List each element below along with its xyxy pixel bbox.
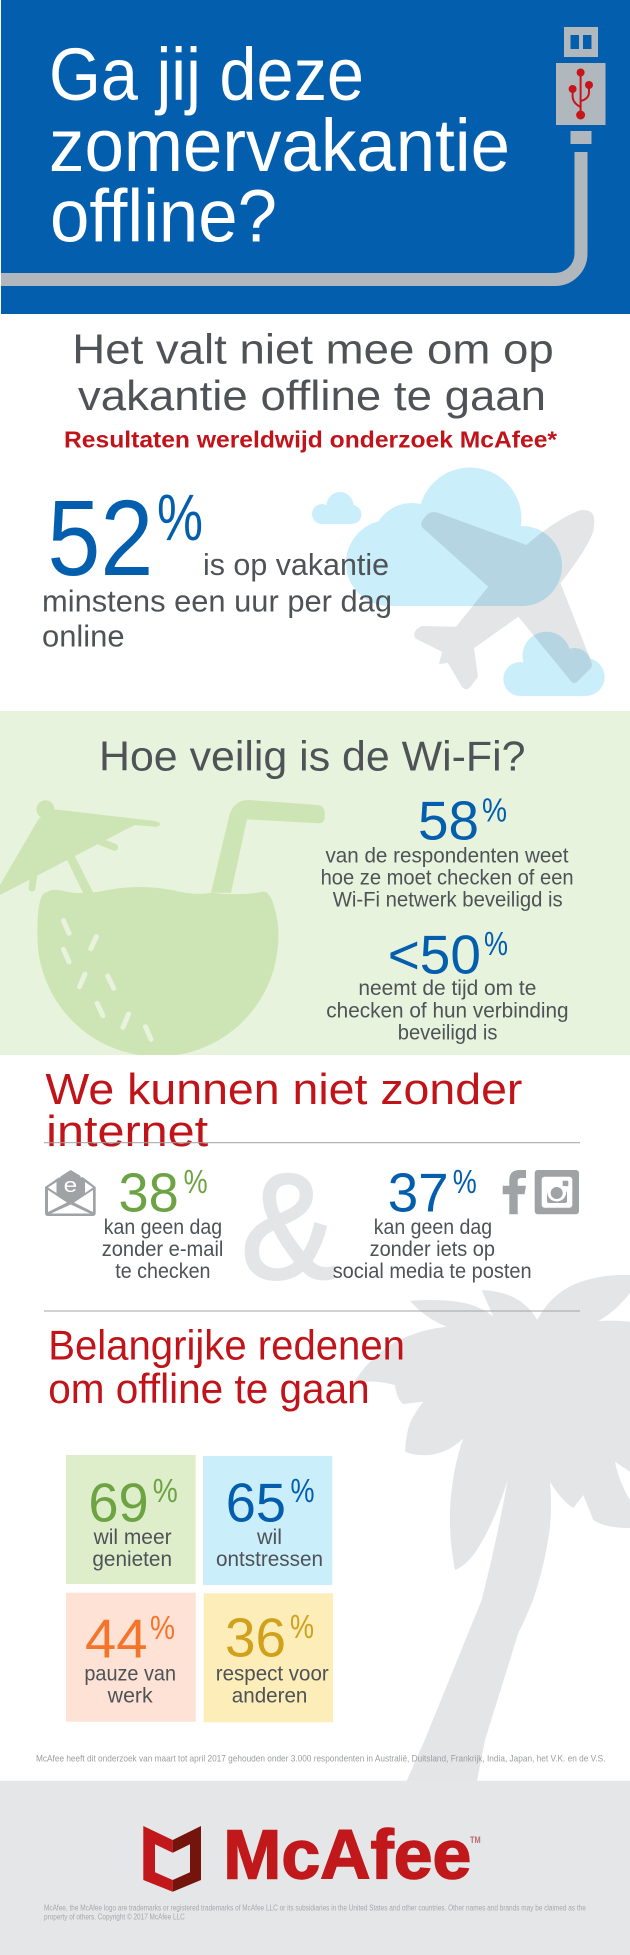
stat: 37 percent social media: % — [453, 1163, 477, 1200]
title: offline? — [50, 175, 277, 258]
card: 65 percent: 65 — [226, 1472, 286, 1534]
logo: mcafee: McAfee — [223, 1815, 471, 1893]
card: 69 percent: % — [153, 1472, 178, 1509]
card: 44 percent — [66, 1593, 196, 1722]
card: 69 percent: 69 — [88, 1472, 149, 1534]
logo: mcafee: TM — [470, 1835, 481, 1845]
stat: 58 percent: % — [482, 792, 507, 829]
stat: 52 percent: online — [42, 619, 125, 654]
legal text: property of others. Copyright © 2017 McAfee LLC — [44, 1912, 185, 1922]
stat: 38 percent email — [102, 1162, 223, 1283]
stat: 52 percent: minstens een uur per dag — [42, 584, 392, 619]
card: 65 percent: wil — [256, 1526, 282, 1549]
stat: 58 percent: hoe ze moet checken of een — [321, 866, 574, 889]
stat: less than 50 percent: beveiligd is — [398, 1021, 497, 1044]
icon: email envelope — [45, 1170, 96, 1216]
stat: 52 percent: 52 — [47, 477, 153, 598]
illustration: clouds and plane — [312, 468, 605, 696]
ampersand: & — [241, 1142, 336, 1310]
stat: less than 50 percent: neemt de tijd om te — [358, 977, 536, 1000]
stat: 38 percent email: zonder e-mail — [102, 1238, 223, 1261]
panel: footer — [0, 1781, 630, 1955]
heading: reasons to go offline — [48, 1321, 405, 1412]
card: 44 percent: 44 — [85, 1608, 148, 1670]
stat: less than 50 percent — [326, 923, 569, 1044]
card: 44 percent: % — [150, 1609, 175, 1646]
icon: usb cable — [1, 27, 606, 280]
stat: 52 percent: % — [157, 480, 203, 554]
title: Ga jij deze — [49, 33, 364, 116]
card: 65 percent: ontstressen — [216, 1548, 323, 1571]
title: zomervakantie — [49, 104, 510, 187]
stat: 38 percent email: te checken — [115, 1260, 210, 1283]
stat: 37 percent social media: 37 — [388, 1162, 449, 1224]
stat: 37 percent social media: zonder iets op — [370, 1238, 495, 1261]
stat: 52 percent: is op vakantie — [203, 547, 389, 582]
illustration: coconut drink — [0, 800, 630, 1058]
panel: wifi safety — [0, 711, 630, 1058]
card: 36 percent: anderen — [232, 1685, 307, 1708]
card: 65 percent — [203, 1456, 332, 1585]
heading: we cannot live without internet — [45, 1065, 522, 1156]
stat: 58 percent: 58 — [418, 789, 479, 851]
header panel — [1, 0, 630, 314]
stat: 58 percent: Wi-Fi netwerk beveiligd is — [333, 889, 563, 912]
legal text — [44, 1904, 586, 1922]
card: 36 percent — [204, 1593, 333, 1722]
panel: subtitle — [64, 325, 557, 452]
icon: email envelope: e — [64, 1175, 77, 1197]
card: 36 percent: respect voor — [216, 1663, 329, 1686]
icon: instagram — [535, 1170, 579, 1214]
card: 65 percent: % — [290, 1472, 314, 1509]
heading: we cannot live without internet: internet — [46, 1107, 208, 1156]
illustration: palm tree — [353, 1275, 630, 1781]
stat: 58 percent — [321, 789, 574, 912]
stat: 38 percent email: % — [184, 1163, 208, 1200]
panel: subtitle: vakantie offline te gaan — [78, 372, 546, 419]
card: 69 percent — [66, 1455, 196, 1584]
stat: 37 percent social media — [333, 1162, 532, 1283]
stat: 37 percent social media: social media te posten — [333, 1260, 532, 1283]
heading: reasons to go offline: Belangrijke redenen — [48, 1321, 405, 1368]
panel: subtitle: Resultaten wereldwijd onderzoek McAfee* — [64, 426, 557, 452]
stat: less than 50 percent: % — [484, 925, 508, 962]
stat: 52 percent — [42, 477, 392, 654]
icon: facebook — [503, 1170, 526, 1214]
heading: Hoe veilig is de Wi-Fi? — [99, 733, 526, 780]
card: 36 percent: 36 — [225, 1607, 286, 1669]
card: 69 percent: genieten — [92, 1548, 172, 1571]
stat: 37 percent social media: kan geen dag — [374, 1216, 492, 1239]
panel: subtitle: Het valt niet mee om op — [72, 325, 554, 372]
heading: we cannot live without internet: We kunnen niet zonder — [45, 1065, 522, 1114]
card: 44 percent: werk — [107, 1685, 153, 1708]
stat: 38 percent email: 38 — [118, 1162, 179, 1224]
title — [49, 33, 510, 258]
stat: less than 50 percent: checken of hun verbinding — [326, 999, 569, 1022]
card: 44 percent: pauze van — [84, 1663, 176, 1686]
heading: reasons to go offline: om offline te gaan — [48, 1365, 370, 1412]
stat: 38 percent email: kan geen dag — [104, 1216, 222, 1239]
card: 69 percent: wil meer — [93, 1526, 172, 1549]
card: 36 percent: % — [290, 1608, 314, 1645]
stat: less than 50 percent: <50 — [388, 923, 481, 985]
stat: 58 percent: van de respondenten weet — [326, 844, 569, 867]
